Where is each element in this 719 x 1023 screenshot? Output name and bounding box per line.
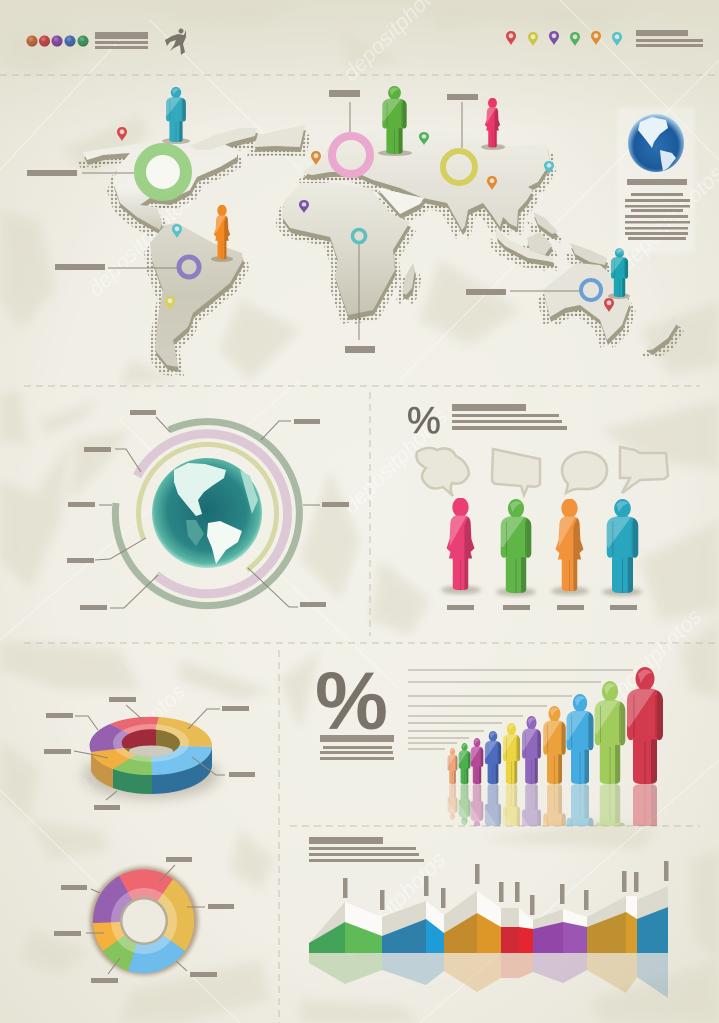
value ticks [343,861,668,915]
heading: large percent with text bars: % [315,656,388,747]
teal globe [152,458,262,568]
bar chart guide lines [408,670,633,749]
people row [441,498,642,610]
panel: globe ring chart [67,410,349,610]
coloured facets [309,907,668,953]
folded area chart [309,861,668,998]
watermark: depositphotos [592,604,706,719]
reflection [309,953,668,998]
legend: colour balls and text bars [26,32,148,49]
3D donut chart [83,717,219,799]
map marker: Africa ring [345,230,375,353]
heading: area chart text bars [309,837,424,862]
map marker: North America ring [27,149,186,195]
flat donut labels [54,857,234,983]
figures [448,667,663,784]
watermark: depositphotos [83,187,197,302]
map marker: Europe ring [329,90,370,174]
map pins [117,127,614,312]
flat donut chart [90,867,198,975]
speech bubbles [416,447,668,496]
icon: blue globe [628,114,684,172]
3D donut labels [44,697,255,810]
map figures [162,86,630,299]
map marker: Asia ring [443,94,478,183]
world map [77,125,684,376]
panel: globe and text [617,107,695,253]
ring arcs [115,422,299,606]
people bar chart [448,667,663,826]
folded roof [309,886,668,943]
watermark: depositphotos [76,679,190,794]
watermark: depositphotos [338,404,452,519]
map marker: Australia ring [466,280,601,300]
reflections [448,784,657,826]
labels with leaders [67,410,349,610]
heading: percent with text bars [407,400,567,442]
watermark: depositphotos [336,847,450,962]
heading: percent with text bars: % [407,400,441,442]
legend: map pins and text bars [506,30,703,47]
icon: running figure [165,28,186,55]
map marker: South America ring [55,257,199,277]
